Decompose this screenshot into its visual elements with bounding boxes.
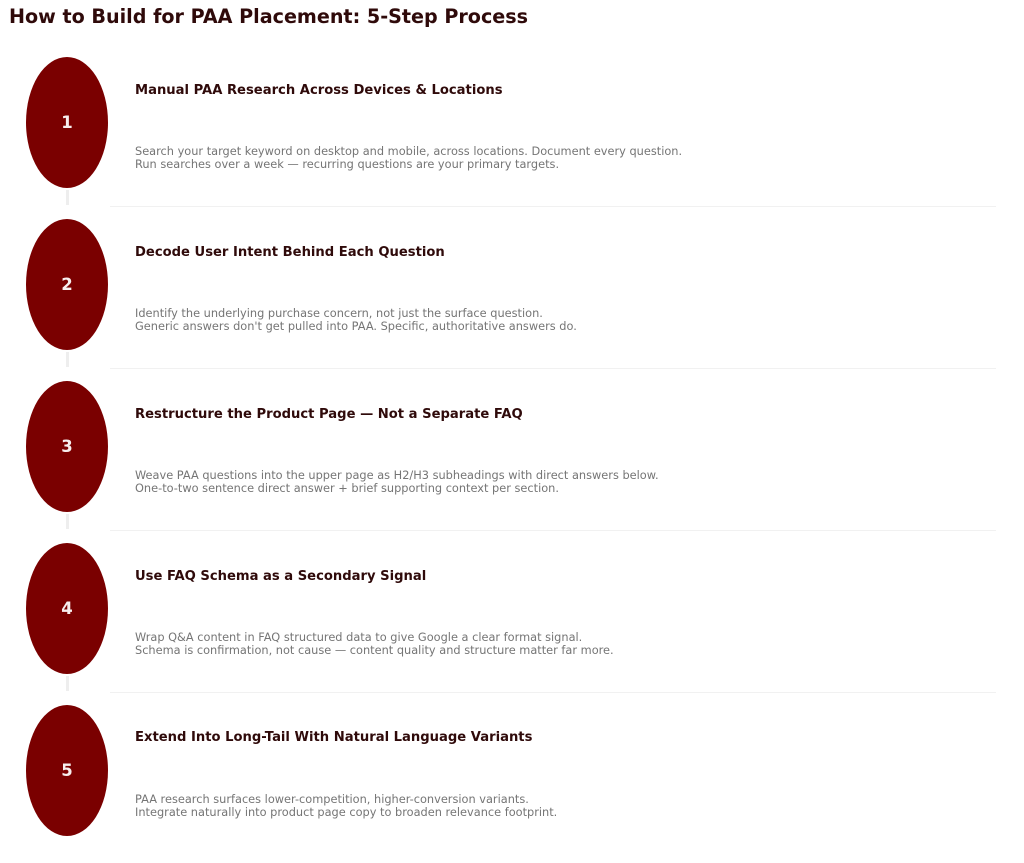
heading: step 2: Decode User Intent Behind Each Question <box>135 245 445 260</box>
icon: step 2 number oval: 2 <box>61 275 73 294</box>
icon: step 3 number oval: 3 <box>61 437 73 456</box>
panel: step 4 <box>26 543 996 693</box>
heading: step 4: Use FAQ Schema as a Secondary Signal <box>135 569 426 584</box>
text: step 5 description: PAA research surfaces lower-competition, higher-conversion variants. <box>135 792 529 806</box>
connector: step 3 to 4 <box>66 514 68 529</box>
icon: step 5 number oval <box>26 705 108 836</box>
icon: step 1 number oval <box>26 57 108 188</box>
icon: step 4 number oval <box>26 543 108 674</box>
panel: step 2 <box>26 219 996 369</box>
panel: step 1 <box>26 57 996 207</box>
text: step 3 description <box>135 468 659 495</box>
text: step 2 description: Generic answers don't get pulled into PAA. Specific, authoritative answers do. <box>135 319 577 333</box>
connector: step 1 to 2 <box>66 190 68 205</box>
text: step 3 description: One-to-two sentence direct answer + brief supporting context per section. <box>135 481 559 495</box>
text: step 1 description: Run searches over a week — recurring questions are your primary targets. <box>135 157 559 171</box>
icon: step 4 number oval: 4 <box>61 599 73 618</box>
text: step 5 description: Integrate naturally into product page copy to broaden relevance footprint. <box>135 805 557 819</box>
text: step 2 description: Identify the underlying purchase concern, not just the surface question. <box>135 306 543 320</box>
heading: step 5: Extend Into Long-Tail With Natural Language Variants <box>135 730 532 745</box>
connector: step 4 to 5 <box>66 676 68 691</box>
icon: step 1 number oval: 1 <box>61 113 73 132</box>
text: step 4 description: Schema is confirmation, not cause — content quality and structure matter far more. <box>135 643 614 657</box>
panel: step 5 <box>26 705 557 836</box>
text: step 3 description: Weave PAA questions into the upper page as H2/H3 subheadings with direct answers below. <box>135 468 659 482</box>
panel: step 3 <box>26 381 996 531</box>
icon: step 5 number oval: 5 <box>61 761 73 780</box>
heading: step 3: Restructure the Product Page — Not a Separate FAQ <box>135 407 523 422</box>
icon: step 3 number oval <box>26 381 108 512</box>
text: step 2 description <box>135 306 577 333</box>
text: step 4 description: Wrap Q&A content in FAQ structured data to give Google a clear format signal. <box>135 630 582 644</box>
connector: step 2 to 3 <box>66 352 68 367</box>
text: step 5 description <box>135 792 557 819</box>
heading: step 1: Manual PAA Research Across Devices & Locations <box>135 83 503 98</box>
icon: step 2 number oval <box>26 219 108 350</box>
title: How to Build for PAA Placement: 5-Step Process <box>9 5 528 28</box>
text: step 1 description: Search your target keyword on desktop and mobile, across locations. Document every question. <box>135 144 682 158</box>
text: step 4 description <box>135 630 614 657</box>
text: step 1 description <box>135 144 682 171</box>
